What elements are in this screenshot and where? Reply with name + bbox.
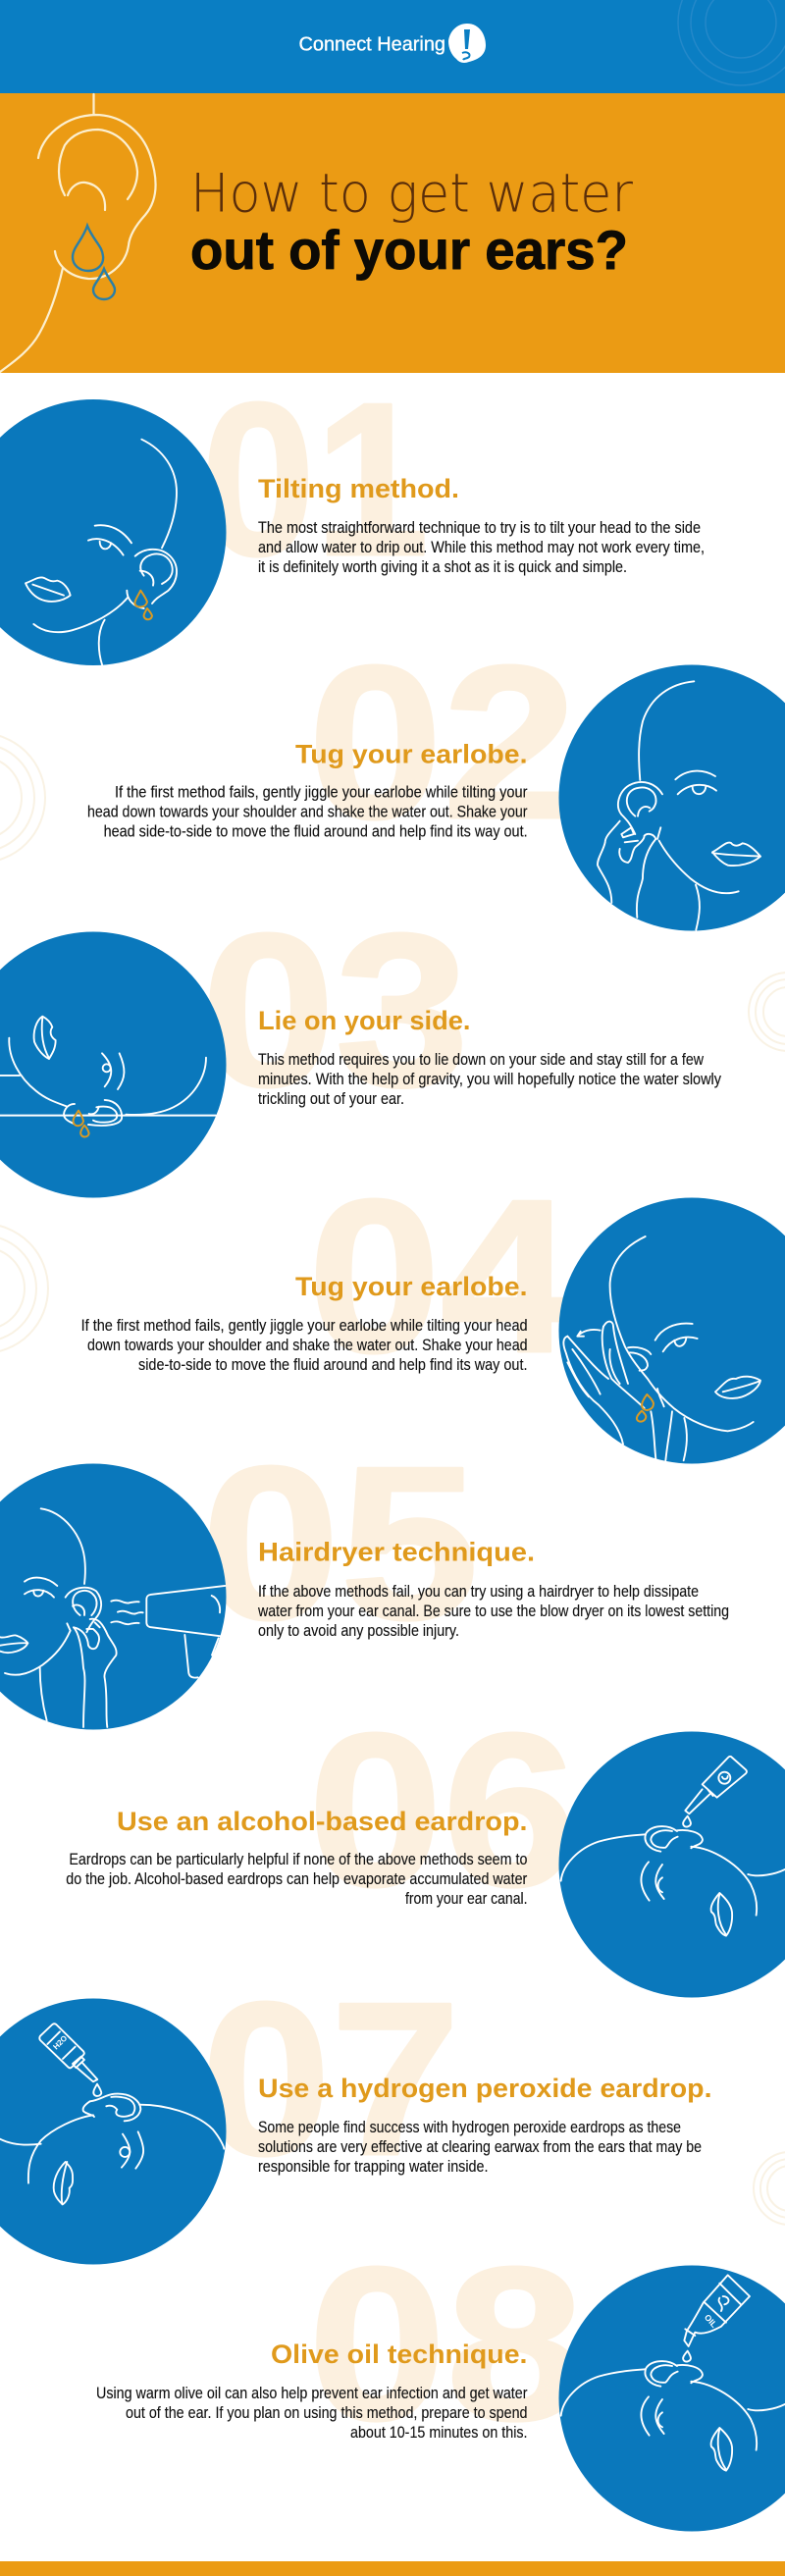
- panel: step 07 hydrogen peroxide eardrop: [0, 1958, 785, 2265]
- heading: Use a hydrogen peroxide eardrop.: [258, 2074, 712, 2103]
- number 07: 07: [201, 1958, 460, 2201]
- body text: If the above methods fail, you can try using a hairdryer to help dissipate: [258, 1583, 699, 1601]
- body text: Eardrops can be particularly helpful if none of the above methods seem to: [69, 1851, 527, 1868]
- bottle label: H2O: [51, 2033, 69, 2051]
- body text: [258, 1051, 722, 1108]
- body text: [87, 784, 528, 841]
- body text: about 10-15 minutes on this.: [350, 2424, 528, 2442]
- panel: step 04 tug your earlobe: [0, 1155, 785, 1464]
- illustration: head lying on side: [0, 932, 226, 1197]
- illustration: hydrogen peroxide eardrop: [0, 1998, 226, 2265]
- body text: [257, 1583, 729, 1640]
- number 05: 05: [201, 1422, 479, 1665]
- number 02: 02: [308, 621, 577, 865]
- number 01: 01: [201, 358, 429, 602]
- footer bar: [0, 2561, 785, 2576]
- body text: The most straightforward technique to try is to tilt your head to the side: [258, 519, 701, 537]
- body text: from your ear canal.: [405, 1890, 528, 1908]
- body text: If the first method fails, gently jiggle your earlobe while tilting your: [115, 784, 528, 802]
- heading: Hairdryer technique.: [258, 1538, 535, 1567]
- panel: step 06 alcohol-based eardrop: [66, 1689, 785, 1998]
- body text: [258, 2119, 702, 2176]
- body text: only to avoid any possible injury.: [258, 1622, 459, 1640]
- panel: step 02 tug your earlobe: [0, 621, 785, 930]
- body text: minutes. With the help of gravity, you will hopefully notice the water slowly: [258, 1071, 722, 1088]
- body text: down towards your shoulder and shake the water out. Shake your head: [87, 1337, 528, 1354]
- heading: Tug your earlobe.: [295, 1272, 528, 1301]
- body text: Some people find success with hydrogen peroxide eardrops as these: [258, 2119, 681, 2136]
- title text: out of your ears?: [190, 219, 628, 281]
- number 08: 08: [308, 2223, 584, 2466]
- body text: head side-to-side to move the fluid around and help find its way out.: [104, 823, 528, 841]
- illustration: hand pulling earlobe: [559, 665, 785, 930]
- body text: [81, 1317, 528, 1374]
- body text: trickling out of your ear.: [258, 1090, 404, 1108]
- decorative rings left: [0, 1224, 48, 1353]
- heading: Lie on your side.: [258, 1006, 471, 1035]
- icon: water drops: [73, 226, 115, 299]
- number 06: 06: [308, 1689, 577, 1932]
- decorative rings right: [754, 2152, 785, 2225]
- number 04: 04: [308, 1155, 573, 1398]
- illustration: hairdryer: [0, 1464, 226, 1729]
- body text: [258, 519, 705, 576]
- body text: This method requires you to lie down on your side and stay still for a few: [258, 1051, 704, 1069]
- body text: head down towards your shoulder and shake the water out. Shake your: [87, 804, 528, 821]
- panel: step 05 hairdryer technique: [0, 1422, 729, 1729]
- body text: Using warm olive oil can also help prevent ear infection and get water: [96, 2385, 528, 2402]
- panel: step 03 lie on your side: [0, 889, 785, 1197]
- panel: step 01 tilting method: [0, 358, 705, 665]
- heading: Tug your earlobe.: [295, 740, 528, 769]
- heading: Olive oil technique.: [271, 2339, 528, 2369]
- bottle label: OIL: [703, 2312, 719, 2330]
- decorative rings right: [749, 973, 785, 1051]
- illustration: hand behind ear: [559, 1197, 785, 1464]
- number 03: 03: [201, 889, 469, 1132]
- body text: do the job. Alcohol-based eardrops can help evaporate accumulated water: [66, 1870, 528, 1888]
- body text: and allow water to drip out. While this method may not work every time,: [258, 539, 705, 556]
- logo: Connect Hearing: [298, 24, 486, 63]
- heading: Use an alcohol-based eardrop.: [117, 1807, 528, 1836]
- title banner: [0, 93, 785, 373]
- decorative rings left: [0, 733, 45, 863]
- body text: solutions are very effective at clearing earwax from the ears that may be: [258, 2138, 702, 2156]
- title text: [190, 163, 634, 281]
- illustration: tilted head: [0, 399, 226, 665]
- body text: [66, 1851, 528, 1908]
- body text: responsible for trapping water inside.: [258, 2158, 489, 2176]
- title text: How to get water: [190, 163, 634, 224]
- body text: If the first method fails, gently jiggle your earlobe while tilting your head: [81, 1317, 528, 1335]
- heading: Tilting method.: [258, 474, 459, 503]
- icon: ear with water drops: [0, 94, 156, 372]
- top header band: [0, 0, 785, 93]
- body text: out of the ear. If you plan on using this method, prepare to spend: [126, 2404, 528, 2422]
- logo: Connect Hearing: Connect Hearing: [298, 33, 445, 55]
- body text: it is definitely worth giving it a shot as it is quick and simple.: [258, 558, 627, 576]
- panel: step 08 olive oil technique: [96, 2223, 785, 2532]
- body text: [96, 2385, 528, 2442]
- illustration: alcohol eardrop into ear: [559, 1731, 785, 1998]
- body text: side-to-side to move the fluid around and help find its way out.: [138, 1356, 528, 1374]
- illustration: olive oil drops: [559, 2265, 785, 2532]
